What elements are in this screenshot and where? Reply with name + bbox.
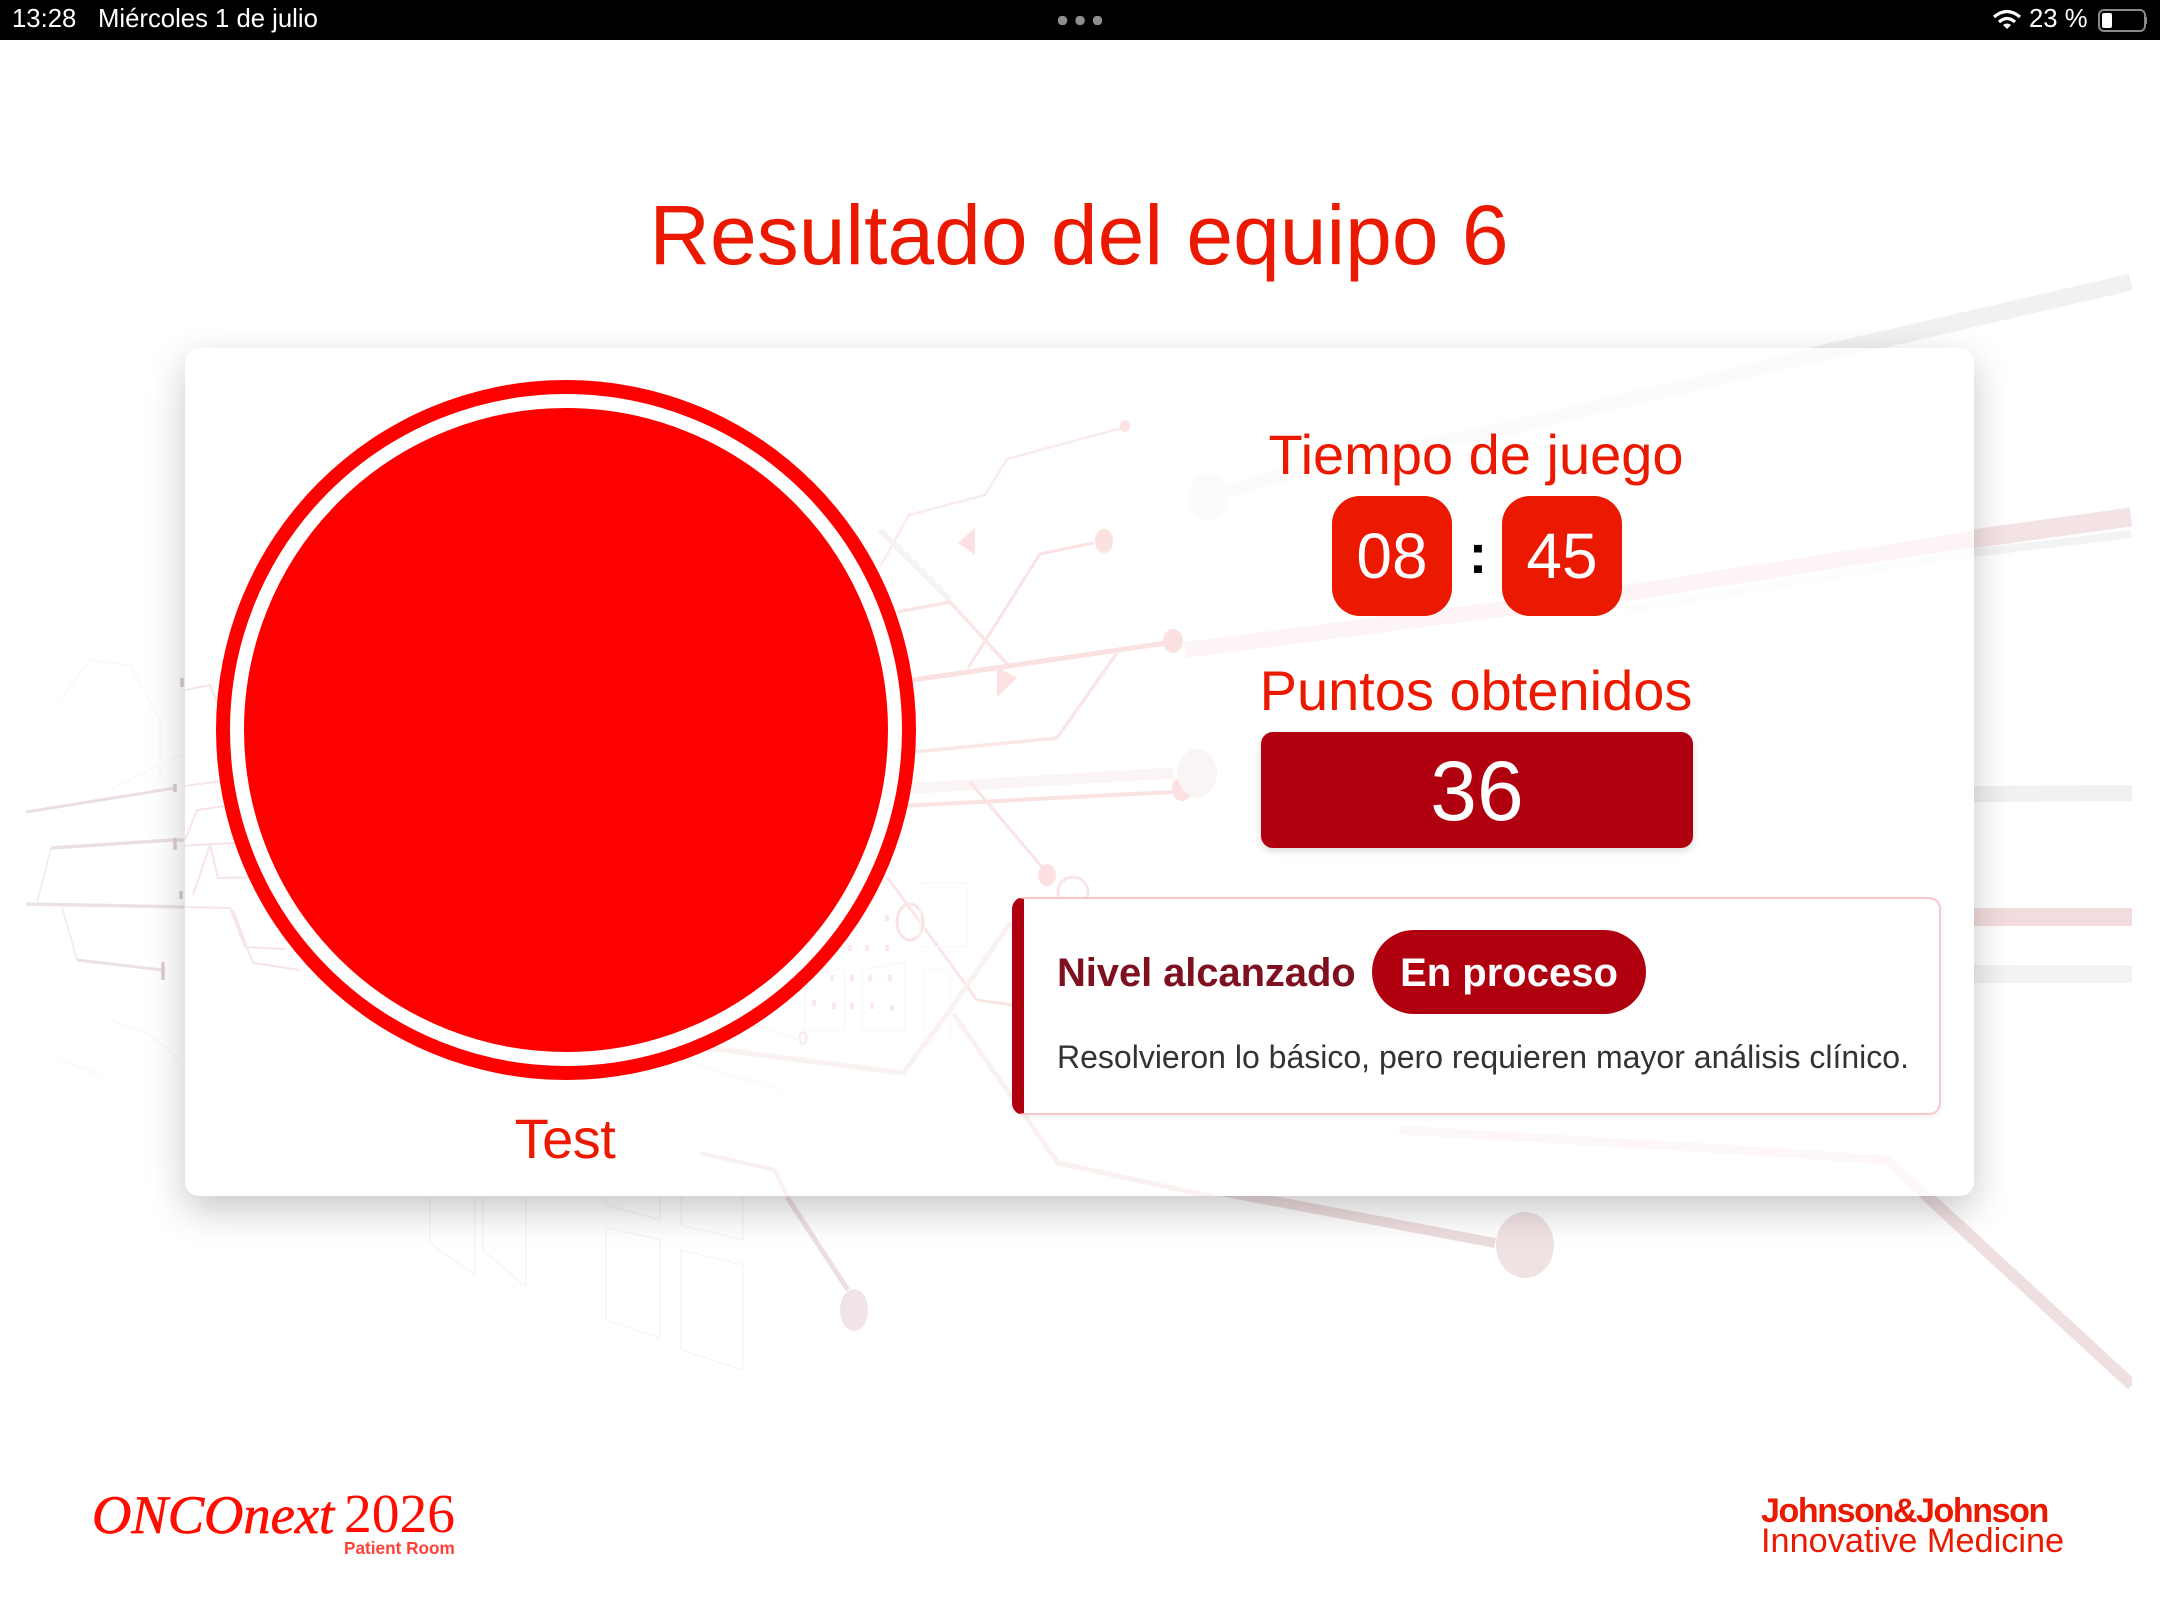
- status date: Miércoles 1 de julio: [98, 5, 318, 33]
- timer minutes: 08: [1356, 520, 1428, 592]
- icon: wifi: [1993, 10, 2021, 29]
- level badge: [1372, 930, 1646, 1014]
- level badge: En proceso: [1400, 951, 1618, 995]
- logo brand: Johnson&Johnson: [1761, 1492, 2048, 1530]
- icon: battery: [2098, 9, 2147, 32]
- logo: ONCOnext 2026: [92, 1484, 455, 1558]
- points value: 36: [1430, 744, 1524, 838]
- status dots: [1058, 16, 1102, 25]
- heading: game time: Tiempo de juego: [1268, 423, 1684, 486]
- card watermark: circuit lines: [185, 420, 1974, 1196]
- timer minutes: [1332, 496, 1452, 616]
- panel: level: [1012, 897, 1941, 1115]
- logo division: Innovative Medicine: [1761, 1522, 2064, 1560]
- status bar: [0, 0, 2160, 40]
- timer seconds: 45: [1526, 520, 1598, 592]
- team avatar circle: [230, 394, 902, 1066]
- status battery percent: 23 %: [2029, 5, 2088, 33]
- team name: Test: [515, 1107, 615, 1170]
- status time: 13:28: [12, 5, 76, 33]
- logo wordmark: ONCOnext: [92, 1484, 334, 1545]
- background: circuit lines: [26, 274, 2132, 1390]
- timer colon: :: [1469, 522, 1487, 585]
- logo subtitle: Patient Room: [344, 1538, 455, 1558]
- level description: Resolvieron lo básico, pero requieren mayor análisis clínico.: [1057, 1039, 1909, 1075]
- heading: points: Puntos obtenidos: [1260, 659, 1692, 722]
- points value: [1261, 732, 1693, 848]
- logo year: 2026: [344, 1484, 455, 1545]
- logo: Johnson & Johnson Innovative Medicine: [1761, 1492, 2064, 1560]
- panel: results card: [185, 348, 1974, 1196]
- title: Resultado del equipo 6: [649, 188, 1509, 282]
- level label: Nivel alcanzado: [1057, 951, 1356, 995]
- timer seconds: [1502, 496, 1622, 616]
